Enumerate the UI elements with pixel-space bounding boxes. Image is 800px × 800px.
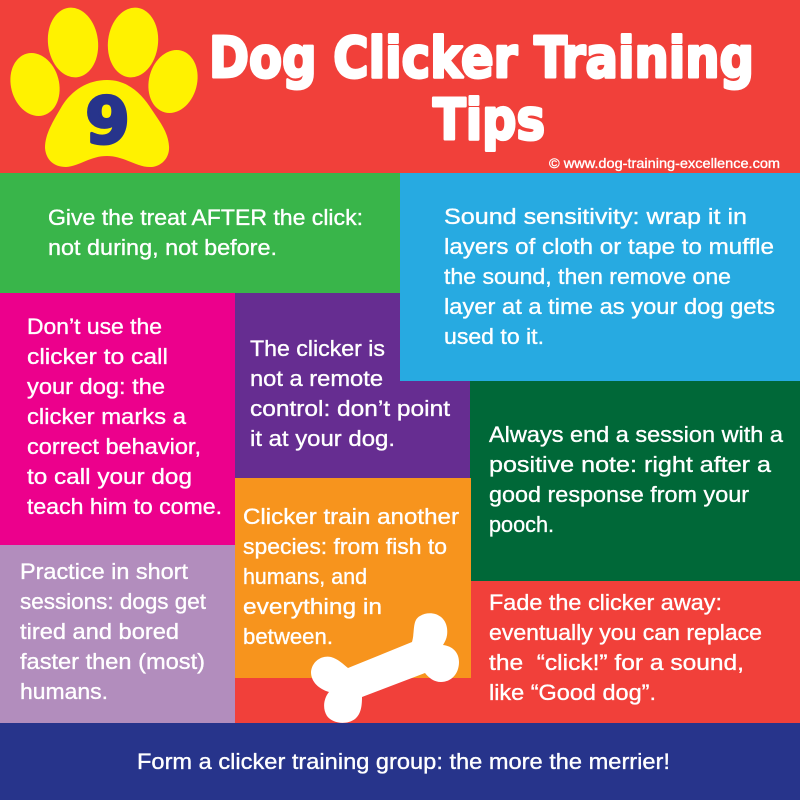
panel: don't call your dog: clicker to call (27, 344, 168, 369)
panel: training group footer: Form a clicker training group: the more the merrier! (137, 749, 670, 774)
panel: short sessions: faster then (most) (20, 649, 205, 674)
panel: not a remote control: The clicker is (250, 336, 385, 361)
panel: fade the clicker: the “click!” for a sound, (489, 650, 744, 675)
panel: fade the clicker: like “Good dog”. (489, 680, 656, 705)
panel: fade the clicker: eventually you can replace (489, 620, 762, 645)
panel: end on a positive note: good response from your (489, 482, 750, 507)
panel: end on a positive note: Always end a session with a (489, 422, 783, 447)
panel: short sessions: humans. (20, 679, 108, 704)
panel: train another species: Clicker train another (243, 504, 460, 529)
panel: sound sensitivity (400, 173, 800, 381)
paw number: 9 (85, 85, 130, 159)
panel: treat after click: not during, not before. (48, 235, 277, 260)
panel: short sessions (0, 545, 235, 723)
title: Tips (433, 88, 545, 153)
panel: train another species: everything in (243, 594, 382, 619)
panel: sound sensitivity: layers of cloth or tape to muffle (444, 234, 774, 259)
panel: train another species: species: from fish to (243, 534, 447, 559)
panel: don't call your dog: your dog: the (27, 374, 165, 399)
title (209, 26, 754, 153)
panel: don't call your dog: Don’t use the (27, 314, 162, 339)
panel: not a remote control: it at your dog. (250, 426, 395, 451)
panel: short sessions: Practice in short (20, 559, 189, 584)
panel: short sessions: tired and bored (20, 619, 179, 644)
panel: not a remote control: not a remote (250, 366, 383, 391)
panel: end on a positive note (470, 381, 800, 581)
panel: end on a positive note: positive note: right after a (489, 452, 772, 477)
panel: treat after click (0, 173, 400, 293)
panel: train another species: between. (243, 624, 333, 649)
panel: don't call your dog: to call your dog (27, 464, 192, 489)
panel: sound sensitivity: used to it. (444, 324, 544, 349)
panel: sound sensitivity: Sound sensitivity: wrap it in (444, 204, 747, 229)
icon: yellow paw with number 9 (4, 5, 204, 167)
panel: sound sensitivity: layer at a time as your dog gets (444, 294, 775, 319)
panel: don't call your dog: correct behavior, (27, 434, 201, 459)
panel: not a remote control (235, 293, 470, 478)
panel: sound sensitivity: the sound, then remove one (444, 264, 731, 289)
credit: © www.dog-training-excellence.com (549, 155, 780, 171)
panel: short sessions: sessions: dogs get (20, 589, 207, 614)
panel: not a remote control: control: don’t point (250, 396, 451, 421)
panel: don't call your dog: teach him to come. (27, 494, 222, 519)
panel: don't call your dog: clicker marks a (27, 404, 187, 429)
panel: train another species: humans, and (243, 564, 367, 589)
icon: bone (311, 613, 459, 723)
panel: treat after click: Give the treat AFTER the click: (48, 205, 363, 230)
panel: end on a positive note: pooch. (489, 512, 554, 537)
panel: train another species (235, 478, 471, 678)
panel: training group footer (0, 723, 800, 800)
panel: fade the clicker: Fade the clicker away: (489, 590, 722, 615)
panel: don't call your dog (0, 293, 235, 545)
panel: fade the clicker (489, 590, 762, 705)
